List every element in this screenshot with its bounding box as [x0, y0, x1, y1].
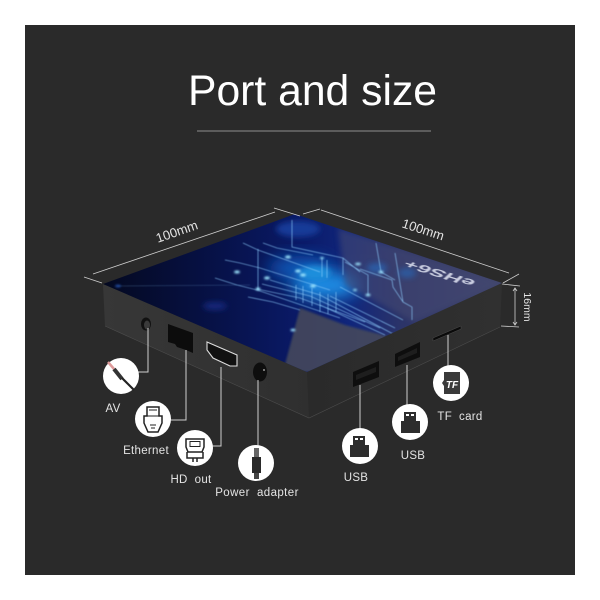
- port: USB 2: [395, 342, 420, 367]
- label: AV: AV: [105, 403, 121, 415]
- icon: HD plug: [177, 430, 213, 466]
- dimension: left 100mm: 100mm: [154, 217, 200, 246]
- port: TF slot: [433, 326, 461, 341]
- top face artwork: [100, 210, 505, 375]
- dimension: left 100mm: [84, 208, 300, 283]
- product box: [100, 210, 505, 418]
- title: Port and size: [188, 67, 437, 115]
- label: Ethernet: Ethernet: [123, 445, 169, 457]
- circuit lines: [118, 220, 412, 335]
- port: power: [253, 362, 267, 382]
- connector lines: [138, 328, 448, 446]
- dimension: right 100mm: 100mm: [400, 216, 446, 243]
- right side face: [307, 283, 502, 418]
- icon: AV plug: [103, 358, 139, 394]
- icon: USB left: [342, 428, 378, 464]
- port: Ethernet: [168, 324, 193, 353]
- port: AV jack: [141, 318, 151, 330]
- port: HD out: [207, 342, 237, 366]
- dimension: 16mm height: [501, 284, 533, 327]
- icon: power plug: [238, 445, 274, 481]
- label: USB left: USB: [344, 472, 368, 484]
- label: HD out: HD out: [170, 474, 212, 486]
- icon: Ethernet plug: [135, 401, 171, 437]
- icon: TF card: [433, 365, 469, 401]
- port: USB 1: [353, 361, 379, 387]
- dimension: right 100mm: [303, 209, 519, 283]
- logo on top face: eHS6+: [400, 258, 479, 288]
- label: USB right: USB: [401, 450, 425, 462]
- label: Power adapter: Power adapter: [215, 487, 299, 499]
- dimension: 16mm height: 16mm: [521, 292, 533, 322]
- label: TF card: TF card: [437, 411, 483, 423]
- icon: TF card: TF: [446, 380, 459, 391]
- left side face: [103, 284, 309, 418]
- icon: USB right: [392, 404, 428, 440]
- circuit nodes: [115, 256, 384, 331]
